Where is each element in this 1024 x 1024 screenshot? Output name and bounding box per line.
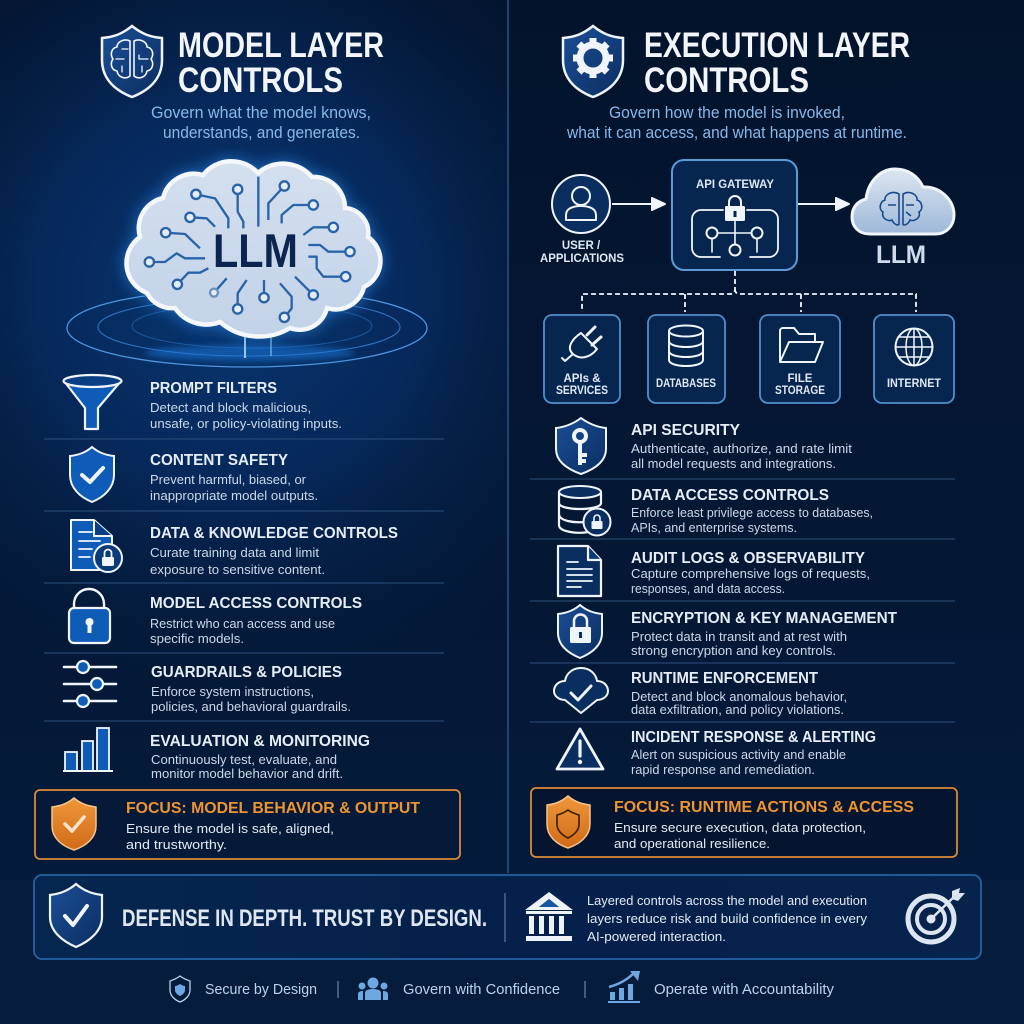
icon: people <box>358 978 388 1000</box>
left panel glow background <box>0 0 507 873</box>
title: API SECURITY <box>631 422 741 439</box>
row: audit logs and observability <box>558 546 870 596</box>
title: DATA ACCESS CONTROLS <box>631 487 829 504</box>
description: Detect and block anomalous behavior, <box>631 690 847 704</box>
title: MODEL ACCESS CONTROLS <box>150 595 362 612</box>
title line 1: EXECUTION LAYER <box>644 26 910 65</box>
node: LLM cloud: LLM <box>876 241 926 269</box>
node: user applications: APPLICATIONS <box>540 253 624 265</box>
node: api gateway: API GATEWAY <box>696 179 774 191</box>
dashed connectors <box>582 271 916 312</box>
headline: DEFENSE IN DEPTH. TRUST BY DESIGN. <box>122 905 487 932</box>
icon: orange shield check <box>52 798 96 850</box>
icon: lock shield <box>558 605 602 658</box>
icon: padlock <box>69 589 110 643</box>
title: GUARDRAILS & POLICIES <box>151 664 342 681</box>
icon: target <box>908 888 965 942</box>
icon: growth chart <box>608 971 640 1003</box>
cloud body <box>126 161 380 337</box>
title: DATA & KNOWLEDGE CONTROLS <box>150 525 398 542</box>
node: databases <box>648 315 725 403</box>
panel: model layer controls <box>35 26 460 859</box>
title line 2: CONTROLS <box>644 61 809 100</box>
node: user applications: USER / <box>562 240 601 252</box>
description: specific models. <box>150 632 244 646</box>
callout: focus runtime actions <box>531 788 957 857</box>
description: Capture comprehensive logs of requests, <box>631 567 870 581</box>
title: CONTENT SAFETY <box>150 452 289 469</box>
row: content safety <box>70 447 318 503</box>
row: model access controls <box>69 589 362 646</box>
title: AUDIT LOGS & OBSERVABILITY <box>631 550 866 567</box>
label: Secure by Design <box>205 982 317 998</box>
label: Govern with Confidence <box>403 982 560 998</box>
description: responses, and data access. <box>631 582 785 596</box>
icon: funnel <box>64 375 122 429</box>
description: monitor model behavior and drift. <box>151 767 343 781</box>
description: APIs, and enterprise systems. <box>631 521 797 535</box>
description: Ensure secure execution, data protection, <box>614 821 866 835</box>
column divider <box>507 0 509 873</box>
row: prompt filters <box>64 375 342 431</box>
title: FOCUS: MODEL BEHAVIOR & OUTPUT <box>126 800 421 817</box>
node: APIs and services: APIs & <box>563 373 601 385</box>
label: Operate with Accountability <box>654 982 835 998</box>
description: strong encryption and key controls. <box>631 644 836 658</box>
icon: document <box>558 546 601 596</box>
node: user applications <box>540 175 624 265</box>
title: PROMPT FILTERS <box>150 380 277 397</box>
title: FOCUS: RUNTIME ACTIONS & ACCESS <box>614 799 914 816</box>
cloud glow <box>126 161 380 337</box>
icon: warning triangle <box>557 729 603 769</box>
description: Detect and block malicious, <box>150 401 311 415</box>
arrow: user to gateway <box>612 198 665 210</box>
description: Curate training data and limit <box>150 546 320 560</box>
description: layers reduce risk and build confidence in every <box>587 912 868 926</box>
icon: gear shield <box>563 26 623 97</box>
circuit traces <box>145 177 355 322</box>
subtitle line 2: understands, and generates. <box>163 124 360 142</box>
row: data and knowledge controls <box>71 520 398 577</box>
node: internet <box>874 315 954 403</box>
row: runtime enforcement <box>554 668 847 717</box>
icon: small shield <box>170 976 190 1002</box>
description: all model requests and integrations. <box>631 457 836 471</box>
description: and operational resilience. <box>614 837 770 851</box>
description: Enforce least privilege access to databases, <box>631 506 873 520</box>
title: EVALUATION & MONITORING <box>150 733 370 750</box>
arrow: gateway to LLM <box>798 198 849 210</box>
node: LLM cloud <box>852 169 954 269</box>
description: Layered controls across the model and execution <box>587 894 867 908</box>
subtitle line 2: what it can access, and what happens at runtime. <box>566 124 907 142</box>
node: file storage: STORAGE <box>775 385 825 397</box>
icon: check shield <box>50 884 102 947</box>
description: Prevent harmful, biased, or <box>150 473 306 487</box>
description: policies, and behavioral guardrails. <box>151 700 351 714</box>
row: api security <box>556 418 853 474</box>
footer: principles <box>170 971 835 1003</box>
row: encryption and key management <box>558 605 898 658</box>
description: Authenticate, authorize, and rate limit <box>631 442 853 456</box>
description: unsafe, or policy-violating inputs. <box>150 417 342 431</box>
row: evaluation and monitoring <box>63 728 370 781</box>
separator <box>504 893 506 942</box>
title line 1: MODEL LAYER <box>178 26 384 65</box>
row: data access controls <box>559 486 873 536</box>
title line 2: CONTROLS <box>178 61 343 100</box>
diagram: request flow <box>540 160 954 403</box>
row: incident response and alerting <box>557 729 876 777</box>
subtitle line 1: Govern how the model is invoked, <box>609 104 845 122</box>
icon: brain shield <box>102 26 162 97</box>
description: Continuously test, evaluate, and <box>151 753 337 767</box>
node: APIs and services: SERVICES <box>556 385 608 397</box>
subtitle line 1: Govern what the model knows, <box>151 104 371 122</box>
description: AI-powered interaction. <box>587 930 726 944</box>
description: Alert on suspicious activity and enable <box>631 748 846 762</box>
description: and trustworthy. <box>126 838 227 852</box>
description: exposure to sensitive content. <box>150 563 325 577</box>
description: Protect data in transit and at rest with <box>631 630 847 644</box>
node: file storage <box>760 315 840 403</box>
description: Enforce system instructions, <box>151 685 314 699</box>
node: APIs and services <box>544 315 620 403</box>
row: guardrails and policies <box>64 661 351 714</box>
heading: model layer <box>102 26 384 142</box>
description: inappropriate model outputs. <box>150 489 318 503</box>
LLM label: LLM <box>213 224 298 277</box>
node: file storage: FILE <box>788 373 813 385</box>
title: RUNTIME ENFORCEMENT <box>631 670 819 687</box>
banner: defense in depth <box>34 875 981 959</box>
description: Restrict who can access and use <box>150 617 335 631</box>
description: rapid response and remediation. <box>631 763 815 777</box>
icon: key shield <box>556 418 606 474</box>
node: databases: DATABASES <box>656 378 716 390</box>
heading: execution layer <box>563 26 910 142</box>
icon: sliders <box>64 661 116 707</box>
icon: database lock <box>559 486 610 536</box>
panel: execution layer controls <box>530 26 957 857</box>
platform rings <box>67 289 427 367</box>
node: internet: INTERNET <box>887 378 941 390</box>
title: INCIDENT RESPONSE & ALERTING <box>631 729 876 746</box>
illustration: LLM brain cloud <box>67 161 427 367</box>
callout: focus model behavior <box>35 790 460 859</box>
icon: document lock <box>71 520 122 572</box>
icon: institution <box>525 892 573 941</box>
title: ENCRYPTION & KEY MANAGEMENT <box>631 610 898 627</box>
node: api gateway <box>672 160 797 270</box>
icon: bar chart <box>63 728 113 771</box>
description: data exfiltration, and policy violations. <box>631 703 844 717</box>
description: Ensure the model is safe, aligned, <box>126 822 334 836</box>
icon: shield check <box>70 447 114 502</box>
icon: orange shield <box>547 796 590 848</box>
icon: cloud check <box>554 668 608 713</box>
